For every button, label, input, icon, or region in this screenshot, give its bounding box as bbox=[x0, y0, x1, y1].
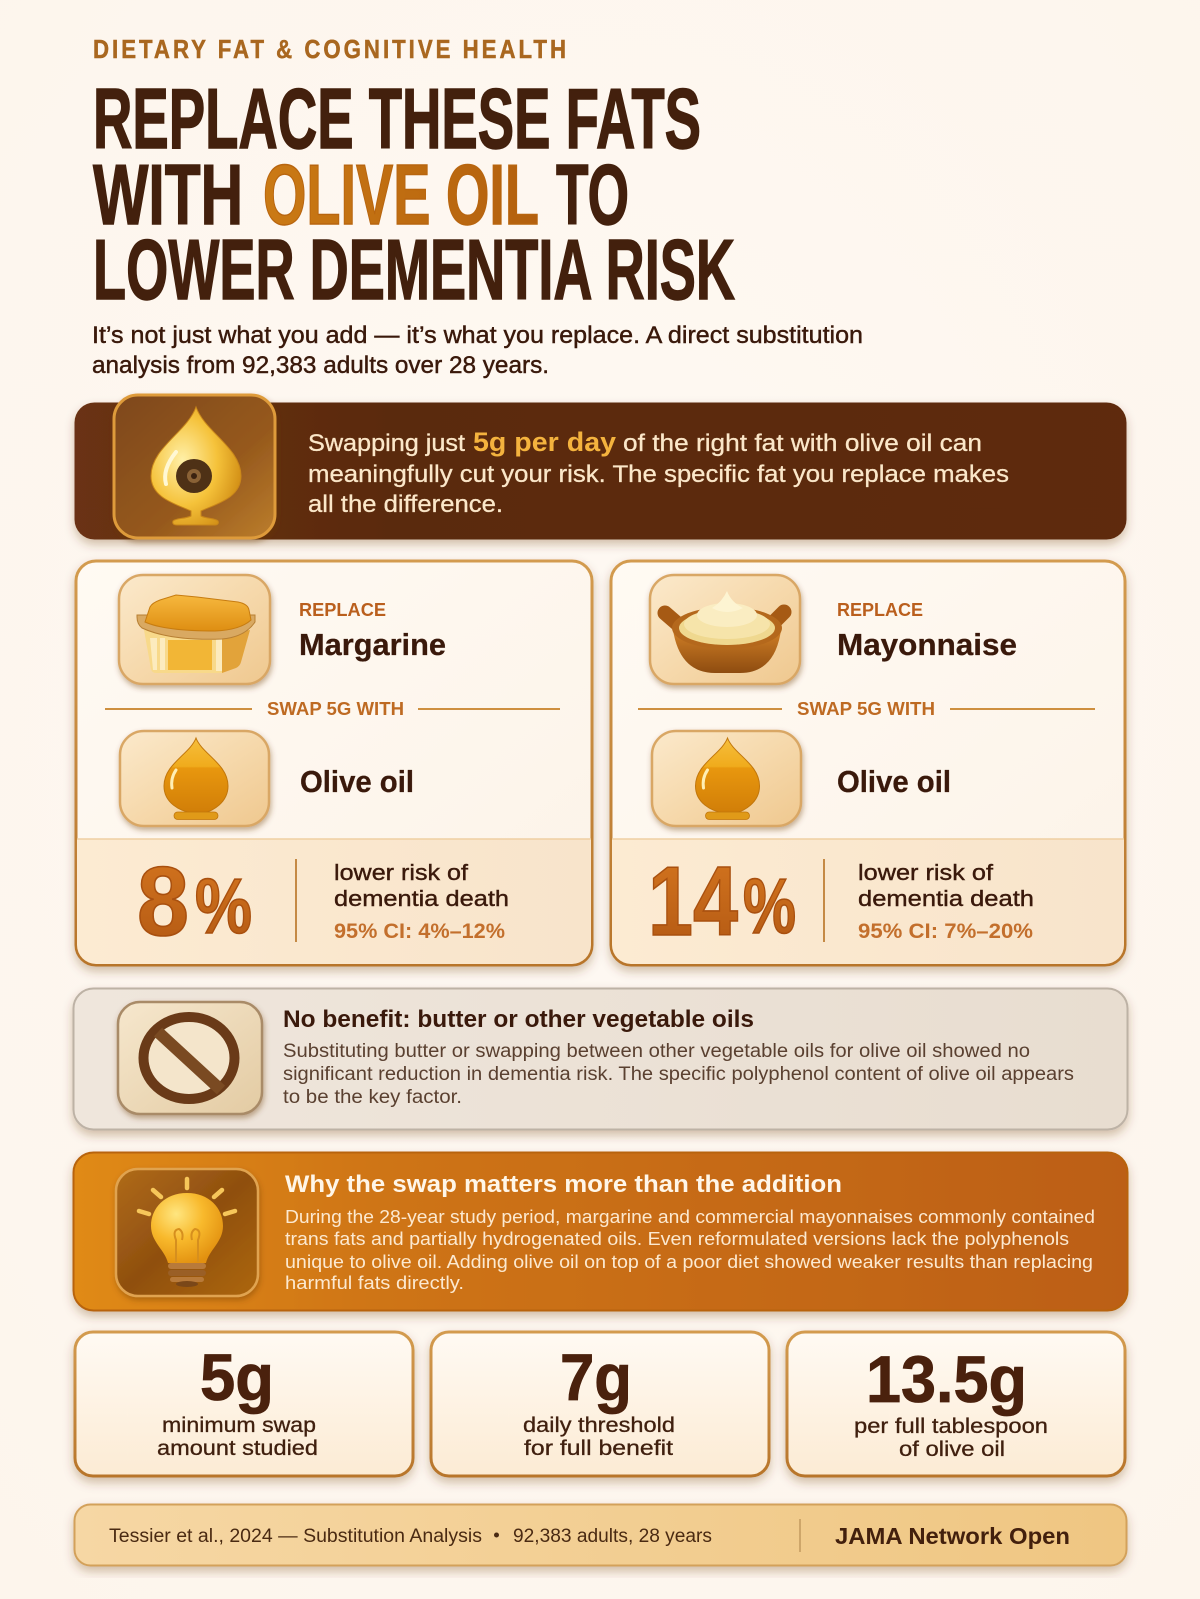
statistic: 8 percent: % bbox=[195, 862, 252, 950]
food name: margarine: Margarine bbox=[299, 627, 446, 662]
why heading: Why the swap matters more than the addition bbox=[285, 1171, 842, 1198]
note body: to be the key factor. bbox=[283, 1087, 462, 1108]
stat tile: 5g bbox=[75, 1332, 413, 1476]
title: LOWER DEMENTIA RISK bbox=[93, 223, 735, 318]
icon: olive oil drop bbox=[652, 731, 801, 826]
risk text: lower risk of bbox=[858, 860, 994, 885]
why body bbox=[285, 1207, 1095, 1293]
stat tile: 5g: minimum swap bbox=[162, 1414, 316, 1437]
why body: During the 28-year study period, margarine and commercial mayonnaises commonly contained bbox=[285, 1207, 1095, 1227]
why body: trans fats and partially hydrogenated oils. Even reformulated versions lack the polyphenols bbox=[285, 1229, 1069, 1249]
statistic: 8 percent bbox=[137, 846, 252, 956]
title: WITH bbox=[93, 148, 243, 243]
statistic: 14 percent: 14 bbox=[648, 846, 738, 956]
replace label: REPLACE bbox=[299, 600, 386, 620]
banner text: Swapping just bbox=[308, 430, 465, 457]
stat tile: 7g: daily threshold bbox=[523, 1414, 675, 1437]
note body bbox=[283, 1041, 1074, 1108]
swap divider: SWAP 5G WITH bbox=[267, 699, 404, 719]
stat tile: 13.5g bbox=[787, 1332, 1125, 1476]
why body: unique to olive oil. Adding olive oil on top of a poor diet showed weaker results than replacing bbox=[285, 1252, 1093, 1272]
panel: key message banner bbox=[74, 395, 1126, 540]
panel: mayonnaise swap card bbox=[611, 561, 1125, 965]
why body: harmful fats directly. bbox=[285, 1273, 464, 1293]
banner text: of the right fat with olive oil can bbox=[623, 430, 982, 457]
footer source bar: 92,383 adults, 28 years bbox=[513, 1526, 712, 1547]
icon: olive oil drop bbox=[120, 731, 269, 826]
stat tile: 13.5g: of olive oil bbox=[899, 1438, 1005, 1461]
note body: significant reduction in dementia risk. The specific polyphenol content of olive oil appears bbox=[283, 1064, 1074, 1085]
icon: light bulb bbox=[116, 1169, 258, 1296]
subtitle: analysis from 92,383 adults over 28 years. bbox=[92, 352, 549, 379]
title: REPLACE THESE FATS bbox=[93, 72, 701, 167]
replace label: REPLACE bbox=[837, 600, 923, 620]
note body: Substituting butter or swapping between other vegetable oils for olive oil showed no bbox=[283, 1041, 1030, 1062]
food name: olive oil: Olive oil bbox=[837, 764, 951, 799]
banner text: all the difference. bbox=[308, 491, 503, 518]
risk text bbox=[334, 860, 509, 943]
title bbox=[93, 72, 735, 318]
statistic: 8 percent: 8 bbox=[137, 846, 189, 956]
note heading: No benefit: butter or other vegetable oils bbox=[283, 1006, 754, 1033]
panel: why the swap matters bbox=[74, 1152, 1128, 1310]
panel: no benefit note bbox=[74, 988, 1128, 1130]
stat tile: 7g bbox=[431, 1332, 769, 1476]
banner text: meaningfully cut your risk. The specific fat you replace makes bbox=[308, 461, 1009, 488]
stat tile: 7g: for full benefit bbox=[524, 1437, 673, 1460]
risk text: 95% CI: 4%–12% bbox=[334, 920, 505, 943]
risk text: lower risk of bbox=[334, 860, 469, 885]
stat tile: 13.5g: per full tablespoon bbox=[854, 1415, 1048, 1438]
risk text bbox=[858, 860, 1034, 943]
footer source bar: JAMA Network Open bbox=[835, 1523, 1070, 1549]
stat tile: 13.5g: 13.5g bbox=[866, 1342, 1027, 1416]
subtitle: It’s not just what you add — it’s what you replace. A direct substitution bbox=[92, 322, 863, 349]
icon: margarine tub bbox=[119, 575, 270, 684]
risk text: 95% CI: 7%–20% bbox=[858, 920, 1033, 943]
banner text: 5g per day bbox=[473, 427, 616, 457]
risk text: dementia death bbox=[858, 886, 1034, 911]
stat tile: 5g: amount studied bbox=[157, 1437, 318, 1460]
stat tile: 5g: 5g bbox=[200, 1340, 274, 1414]
title: OLIVE OIL bbox=[263, 148, 539, 243]
food name: olive oil: Olive oil bbox=[300, 764, 414, 799]
eyebrow label: DIETARY FAT & COGNITIVE HEALTH bbox=[93, 34, 569, 64]
banner text bbox=[308, 427, 1009, 518]
risk text: dementia death bbox=[334, 886, 509, 911]
subtitle bbox=[92, 322, 863, 379]
swap divider: SWAP 5G WITH bbox=[797, 699, 935, 719]
food name: mayonnaise: Mayonnaise bbox=[837, 627, 1017, 662]
icon: golden oil drop with olive bbox=[114, 395, 275, 538]
footer source bar: Tessier et al., 2024 — Substitution Analysis bbox=[109, 1526, 482, 1547]
icon: mayonnaise bowl bbox=[650, 575, 800, 684]
statistic: 14 percent: % bbox=[743, 862, 796, 950]
stat tile: 7g: 7g bbox=[560, 1340, 632, 1414]
title: TO bbox=[556, 148, 629, 243]
footer source bar bbox=[74, 1504, 1126, 1566]
panel: margarine swap card bbox=[76, 561, 592, 965]
icon: prohibition sign bbox=[118, 1002, 262, 1114]
